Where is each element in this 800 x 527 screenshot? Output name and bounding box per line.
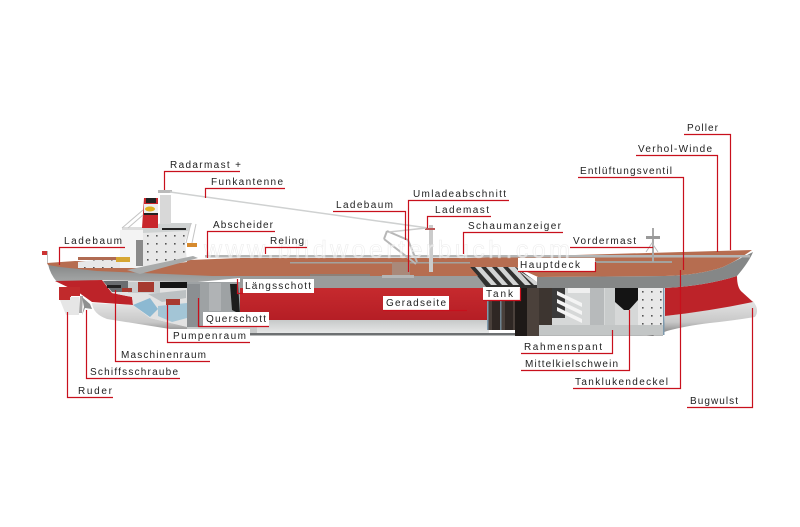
label: Mittelkielschwein — [521, 310, 630, 370]
label: Umladeabschnitt: Umladeabschnitt — [413, 189, 506, 200]
label: Hauptdeck — [518, 258, 596, 272]
label: Bugwulst: Bugwulst — [690, 396, 738, 407]
label: Ladebaum stern — [60, 236, 125, 265]
label: Abscheider: Abscheider — [213, 220, 274, 231]
label: Ruder: Ruder — [78, 386, 113, 397]
label: Rahmenspant — [521, 330, 612, 354]
stern red section — [55, 280, 133, 305]
bow red section — [665, 276, 753, 316]
stern hull gray — [48, 264, 240, 293]
stern deck — [47, 258, 290, 276]
label: Tank — [483, 287, 520, 300]
midship bottom band — [187, 320, 663, 336]
label: Längsschott — [238, 279, 314, 294]
bow bulb — [640, 301, 757, 336]
label: Schaumanzeiger — [464, 221, 563, 254]
label: Tanklukendeckel — [573, 270, 680, 388]
label: Pumpenraum — [168, 305, 250, 342]
label: Lademast: Lademast — [435, 205, 489, 216]
label: Tanklukendeckel: Tanklukendeckel — [575, 377, 668, 388]
engine room — [102, 280, 187, 327]
side shell red — [240, 288, 488, 320]
label: Schiffsschraube — [86, 310, 180, 378]
label: Rahmenspant: Rahmenspant — [524, 342, 602, 353]
label: Verhol-Winde: Verhol-Winde — [638, 144, 712, 155]
label: Radarmast + — [164, 160, 241, 190]
label: Entlüftungsventil: Entlüftungsventil — [580, 166, 672, 177]
label: Maschinenraum — [116, 290, 210, 362]
fore mast — [646, 228, 660, 262]
antenna wire — [170, 192, 428, 228]
label: Hauptdeck: Hauptdeck — [520, 260, 581, 271]
stern flag — [42, 251, 48, 263]
label: Poller: Poller — [687, 123, 719, 134]
radar mast — [122, 190, 196, 243]
label: Entlüftungsventil — [578, 166, 684, 270]
label: Funkantenne — [206, 177, 285, 198]
label: Pumpenraum: Pumpenraum — [173, 331, 246, 342]
label: Verhol-Winde — [636, 144, 718, 252]
label: Abscheider — [208, 220, 275, 258]
label: Reling: Reling — [270, 236, 304, 247]
funnel — [142, 198, 158, 228]
label: Tank: Tank — [486, 289, 514, 300]
stern lower hull — [92, 303, 188, 335]
label: Ruder — [68, 312, 113, 398]
main deck midship and bow — [240, 250, 752, 277]
label: Querschott — [198, 298, 269, 326]
label: Umladeabschnitt — [408, 189, 509, 272]
label: Geradseite: Geradseite — [386, 298, 446, 309]
forward gray band and bow side — [537, 252, 753, 288]
label: Reling — [266, 236, 307, 254]
label: Lademast — [428, 205, 491, 228]
deck rail — [205, 255, 750, 258]
watermark: www.bildwoerterbuch.com — [203, 236, 570, 264]
tank section — [470, 267, 552, 336]
label: Bugwulst — [687, 308, 752, 408]
label: Radarmast +: Radarmast + — [170, 160, 241, 171]
label: Mittelkielschwein: Mittelkielschwein — [525, 359, 618, 370]
label: Geradseite — [383, 296, 467, 310]
label: Ladebaum stern: Ladebaum — [64, 236, 122, 247]
frames interior — [539, 287, 664, 335]
longitudinal bulkhead band — [240, 276, 488, 288]
label: Ladebaum midship: Ladebaum — [336, 200, 393, 211]
tanker ship cutaway — [42, 190, 757, 336]
label: Vordermast: Vordermast — [573, 236, 636, 247]
label: Poller — [684, 123, 730, 250]
label: Längsschott: Längsschott — [245, 281, 311, 292]
label: Schiffsschraube: Schiffsschraube — [90, 367, 178, 378]
label: Ladebaum midship — [333, 200, 406, 240]
label: Maschinenraum: Maschinenraum — [121, 350, 206, 361]
rudder — [59, 287, 83, 315]
superstructure — [78, 223, 198, 274]
label: Funkantenne: Funkantenne — [211, 177, 283, 188]
propeller — [82, 297, 92, 315]
label: Querschott: Querschott — [206, 314, 266, 325]
cargo crane — [384, 225, 435, 272]
label: Schaumanzeiger: Schaumanzeiger — [468, 221, 562, 232]
deck pipes — [290, 261, 672, 278]
transverse bulkhead — [187, 282, 240, 327]
